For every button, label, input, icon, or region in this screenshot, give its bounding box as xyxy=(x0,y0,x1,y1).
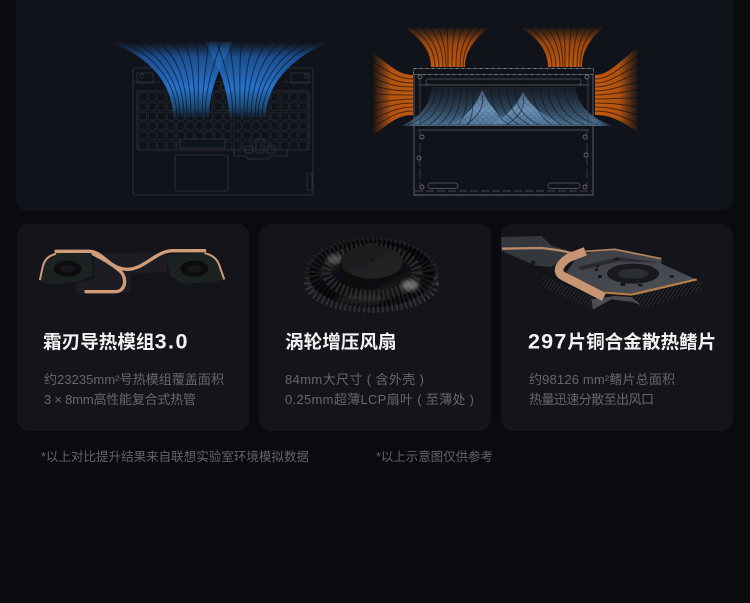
panel: airflow comparison xyxy=(16,0,733,211)
icon: blue intake airflow xyxy=(110,42,330,118)
title: 涡轮增压风扇 xyxy=(285,332,397,352)
icon: laptop underside wireframe with airflow xyxy=(400,68,613,195)
description: 约98126 mm²鳍片总面积 xyxy=(529,372,675,387)
description xyxy=(285,372,474,407)
description: 0.25mm超薄LCP扇叶 ( 至薄处 ) xyxy=(285,392,474,407)
description: 热量迅速分散至出风口 xyxy=(529,392,654,407)
icon: orange exhaust airflow xyxy=(373,28,638,135)
description: 约23235mm²号热模组覆盖面积 xyxy=(44,372,224,387)
description: 3 × 8mm高性能复合式热管 xyxy=(44,392,196,407)
icon: heat pipe module xyxy=(40,251,225,294)
description: 84mm大尺寸 ( 含外壳 ) xyxy=(285,372,424,387)
title: 297片铜合金散热鳍片 xyxy=(528,330,716,354)
icon: turbo fan xyxy=(306,239,437,310)
panel: turbo fan card xyxy=(259,224,491,431)
description xyxy=(529,372,675,407)
panel: copper fins card xyxy=(501,224,733,431)
footnote: test source: *以上对比提升结果来自联想实验室环境模拟数据 xyxy=(41,449,309,464)
footnote: illustration notice: *以上示意图仅供参考 xyxy=(376,449,493,464)
icon: copper fin module xyxy=(501,236,702,309)
title: 霜刃导热模组3.0 xyxy=(43,330,189,354)
description xyxy=(44,372,224,407)
icon: laptop top view wireframe xyxy=(133,68,313,195)
panel: heat pipe module card xyxy=(17,224,249,431)
